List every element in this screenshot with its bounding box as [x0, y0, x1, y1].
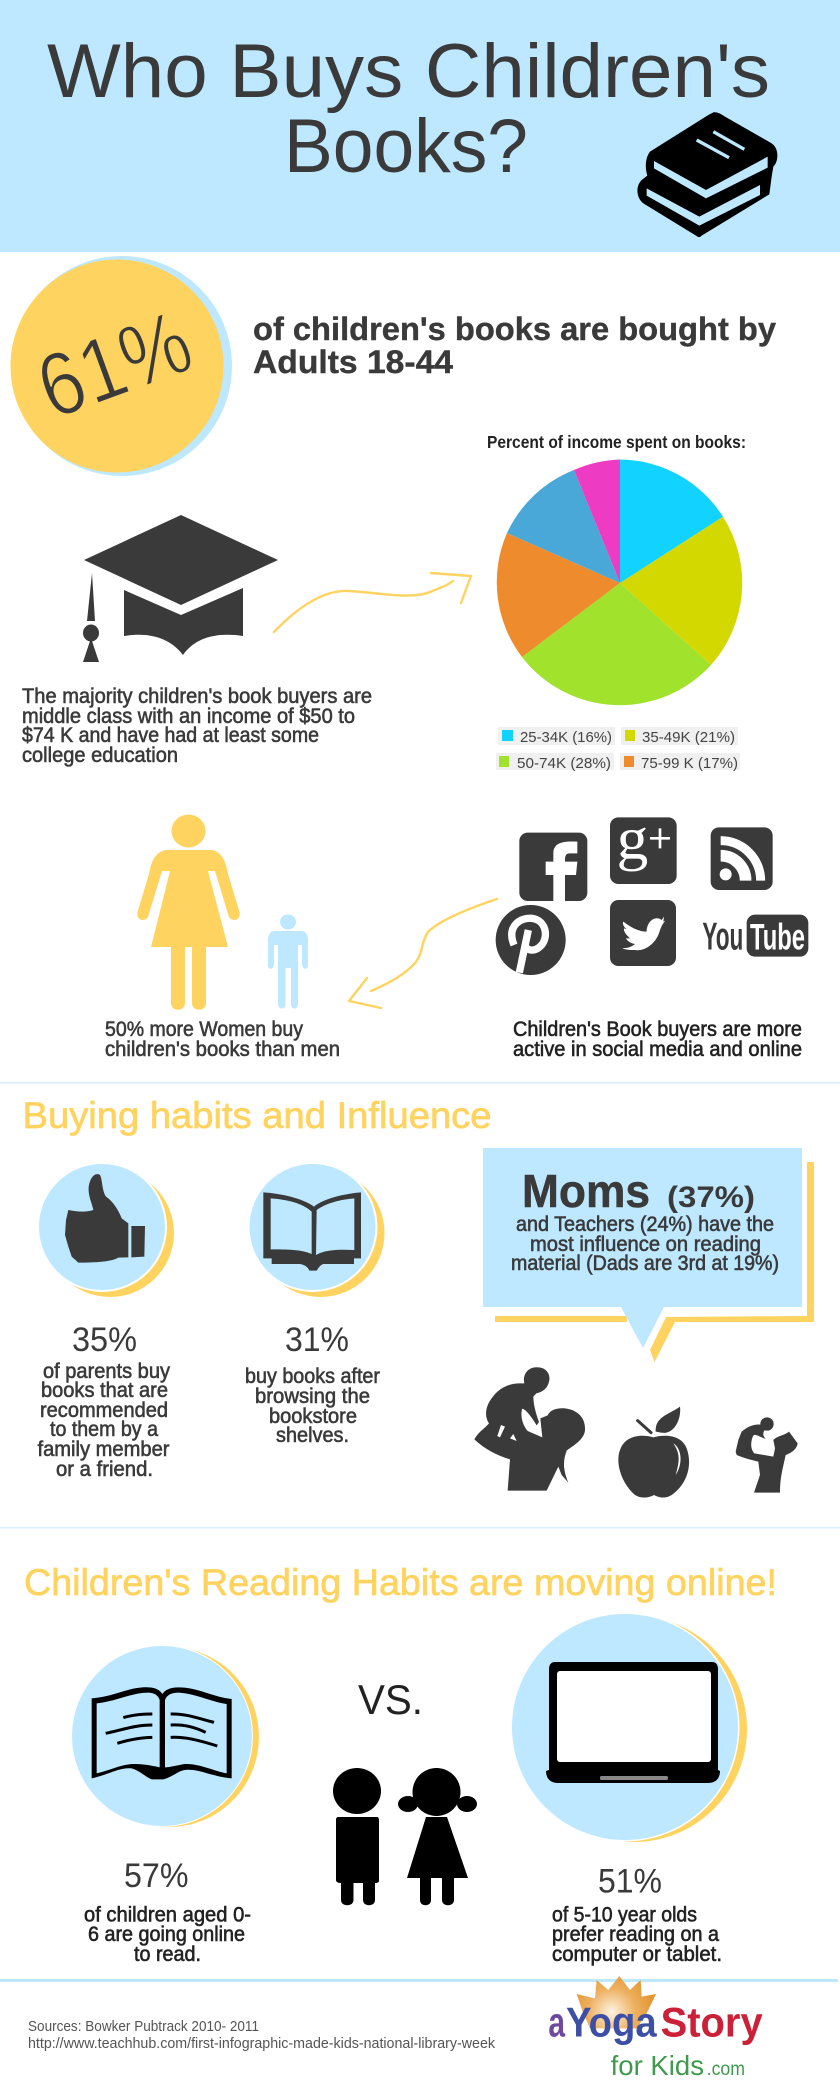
heading: share of adults: [253, 311, 776, 380]
influencer silhouettes: [474, 1367, 798, 1498]
logo: a Yoga Story for Kids: Story: [661, 1999, 763, 2046]
stat: 51 percent: computer or tablet.: [552, 1942, 722, 1966]
stat: 31 percent: buy books after: [245, 1364, 380, 1388]
text: middle class buyers: $74 K and have had at least some: [22, 723, 319, 747]
callout: moms and teachers speech bubble: and Teachers (24%) have the: [516, 1212, 774, 1236]
icon: pinterest: [496, 905, 566, 975]
chart legend: 50-74K (28%): [517, 755, 611, 772]
title: Books?: [284, 104, 528, 189]
heading: share of adults: Adults 18-44: [253, 344, 453, 380]
logo: a Yoga Story for Kids: .com: [707, 2059, 745, 2080]
logo: a Yoga Story for Kids: [548, 1976, 763, 2081]
stat: 51 percent: of 5-10 year olds: [552, 1902, 697, 1926]
icon: boy and girl: [333, 1768, 477, 1905]
icon: woman figure: [137, 814, 240, 1010]
text: women buyers: 50% more Women buy: [105, 1017, 303, 1041]
stat: 51 percent: [552, 1862, 722, 1966]
icon: father and baby: [736, 1417, 798, 1493]
stat: 57 percent: of children aged 0-: [84, 1902, 251, 1926]
icon: google plus: g: [617, 805, 648, 871]
stat: 57 percent: to read.: [134, 1942, 201, 1966]
text: middle class buyers: The majority children's book buyers are: [22, 684, 372, 708]
stat: 35 percent: or a friend.: [56, 1457, 153, 1481]
chart legend: 35-49K (21%): [642, 729, 735, 746]
callout: 61 percent circle: [10, 256, 232, 476]
icon: man figure: [268, 914, 308, 1008]
stat: 35 percent: [38, 1321, 170, 1481]
text: social media buyers: active in social media and online: [513, 1037, 802, 1061]
heading: reading habits: Children's Reading Habits are moving online!: [24, 1562, 777, 1603]
logo: a Yoga Story for Kids: for Kids: [611, 2050, 704, 2081]
heading: buying habits: Buying habits and Influence: [22, 1095, 492, 1136]
icon: youtube: You: [702, 914, 743, 958]
stat: 35 percent: family member: [38, 1437, 170, 1461]
callout: 61 percent circle: 61%: [25, 292, 204, 439]
callout: moms and teachers speech bubble: material (Dads are 3rd at 19%): [511, 1251, 779, 1275]
callout: moms and teachers speech bubble: [483, 1148, 814, 1362]
stat: 51 percent: 51%: [598, 1862, 662, 1900]
stat: 57 percent: 57%: [124, 1857, 188, 1895]
arrow: cap to pie chart: [274, 573, 471, 632]
header panel: [0, 0, 840, 252]
stat: 31 percent: [245, 1321, 380, 1447]
stat: 35 percent: 35%: [72, 1321, 137, 1359]
icon: open book circle: [248, 1162, 384, 1297]
stat: 35 percent: of parents buy: [43, 1359, 170, 1383]
text: sources: Sources: Bowker Pubtrack 2010- 2011: [28, 2018, 259, 2035]
icon: thumbs up circle: [37, 1162, 174, 1297]
text: social media buyers: [513, 1017, 802, 1061]
text: women buyers: [105, 1017, 340, 1061]
icon: mother and baby: [474, 1367, 585, 1491]
chart legend: 75-99 K (17%): [641, 755, 738, 772]
text: sources: http://www.teachhub.com/first-infographic-made-kids-national-library-week: [28, 2035, 495, 2052]
text: social media buyers: Children's Book buyers are more: [513, 1017, 802, 1041]
text: vs: VS.: [358, 1676, 423, 1723]
text: middle class buyers: college education: [22, 743, 178, 767]
stat: 51 percent: prefer reading on a: [552, 1922, 719, 1946]
logo: a Yoga Story for Kids: a: [548, 1999, 565, 2046]
icon: graduation cap: [83, 515, 278, 662]
text: middle class buyers: [22, 684, 372, 767]
icon: google plus: [610, 805, 677, 884]
chart legend: [496, 727, 740, 772]
stat: 57 percent: 6 are going online: [88, 1922, 245, 1946]
icon: rss: [711, 827, 773, 890]
chart heading: Percent of income spent on books:: [487, 432, 746, 452]
icon: twitter: [610, 900, 676, 966]
logo: a Yoga Story for Kids: Yoga: [566, 1999, 657, 2046]
chart legend: 25-34K (16%): [520, 729, 612, 746]
icon: facebook: [519, 833, 587, 901]
icon: youtube: Tube: [750, 915, 805, 957]
stat: 35 percent: to them by a: [50, 1417, 158, 1441]
stat: 31 percent: 31%: [285, 1321, 349, 1359]
callout: moms and teachers speech bubble: Moms: [522, 1165, 650, 1217]
text: women buyers: children's books than men: [105, 1037, 340, 1061]
icon: apple: [618, 1407, 689, 1498]
social media icons: [496, 805, 808, 975]
stat: 31 percent: shelves.: [276, 1423, 349, 1447]
stat: 57 percent: [84, 1857, 251, 1966]
arrow: social media to figures: [349, 899, 497, 1008]
callout: moms and teachers speech bubble: most influence on reading: [530, 1232, 761, 1256]
text: middle class buyers: middle class with an income of $50 to: [22, 704, 355, 728]
stat: 31 percent: bookstore: [269, 1404, 357, 1428]
icon: book circle: [71, 1645, 259, 1827]
icon: youtube: [702, 914, 808, 958]
icon: laptop circle: [510, 1612, 747, 1842]
heading: share of adults: of children's books are bought by: [253, 311, 776, 347]
title: [47, 29, 770, 189]
stat: 35 percent: books that are: [41, 1378, 168, 1402]
title: Who Buys Children's: [47, 29, 770, 114]
stat: 35 percent: recommended: [40, 1398, 168, 1422]
icon: stacked books: [637, 112, 777, 237]
stat: 31 percent: browsing the: [255, 1384, 370, 1408]
callout: moms and teachers speech bubble: (37%): [667, 1181, 755, 1214]
pie chart: [497, 460, 742, 705]
text: sources: [28, 2018, 495, 2052]
